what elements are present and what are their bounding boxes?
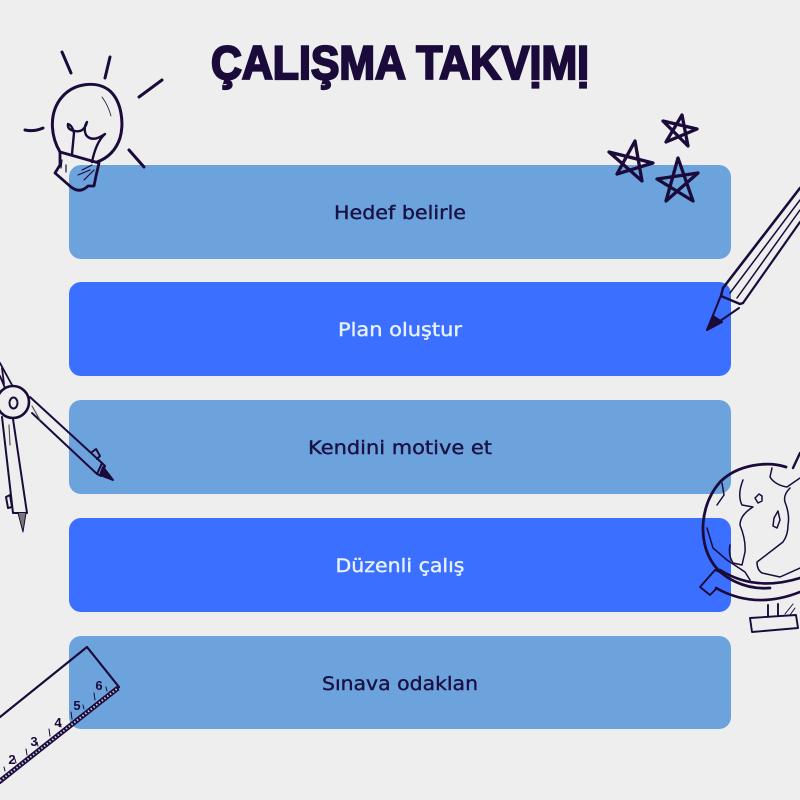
ruler numbers: 4 (54, 715, 62, 730)
step 5: Sınava odaklan: Sınava odaklan (322, 673, 478, 695)
icon: pencil (707, 188, 800, 330)
icon: light bulb (25, 52, 162, 190)
ruler numbers: 3 (30, 734, 38, 749)
step 2: Plan oluştur (69, 282, 731, 376)
icon: stars (609, 115, 698, 201)
ruler scale band (0, 688, 118, 781)
step 5: Sınava odaklan (69, 636, 731, 729)
title: ÇALIŞMA TAKVỊMỊ (211, 36, 589, 89)
step list (69, 165, 731, 729)
ruler body (0, 647, 119, 783)
globe meridian ring (716, 570, 800, 600)
globe continents (729, 480, 800, 577)
ruler numbers: 6 (95, 678, 103, 693)
ruler numbers (8, 678, 103, 767)
globe sphere (703, 464, 786, 588)
step 2: Plan oluştur: Plan oluştur (338, 319, 462, 341)
step 1: Hedef belirle: Hedef belirle (334, 202, 466, 224)
ruler numbers: 2 (8, 752, 16, 767)
icon: ruler (0, 647, 119, 783)
ruler ticks (4, 687, 107, 771)
step 4: Düzenli çalış: Düzenli çalış (336, 555, 464, 577)
step 3: Kendini motive et: Kendini motive et (308, 437, 492, 459)
icon: globe (700, 453, 800, 632)
step 3: Kendini motive et (69, 400, 731, 494)
globe stand (700, 570, 798, 632)
icon: compass (0, 363, 113, 532)
ruler numbers: 5 (73, 698, 81, 713)
step 1: Hedef belirle (69, 165, 731, 259)
step 4: Düzenli çalış (69, 518, 731, 612)
